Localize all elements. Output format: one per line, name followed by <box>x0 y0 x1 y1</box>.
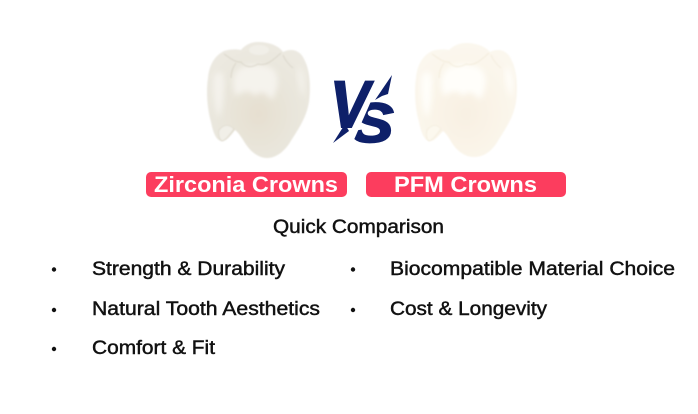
icon: VS emblem: S <box>351 92 394 154</box>
list item: Comfort & Fit <box>52 338 216 359</box>
icon: PFM crown tooth <box>415 43 517 157</box>
icon: zirconia crown tooth <box>207 42 310 158</box>
label: PFM Crowns <box>366 172 566 197</box>
list: right column <box>351 259 675 320</box>
label: Zirconia Crowns: Zirconia Crowns <box>154 172 338 197</box>
icon: VS emblem <box>330 69 394 154</box>
label: PFM Crowns: PFM Crowns <box>394 172 537 197</box>
heading: Quick Comparison: Quick Comparison <box>273 217 444 238</box>
list item: Cost & Longevity: Cost & Longevity <box>390 299 548 320</box>
icon: VS emblem: V <box>330 69 375 142</box>
list item: Natural Tooth Aesthetics: Natural Tooth Aesthetics <box>92 299 320 320</box>
list item: Strength & Durability: Strength & Durability <box>92 259 286 280</box>
list item: Comfort & Fit: Comfort & Fit <box>92 338 216 359</box>
list: left column <box>52 259 320 359</box>
list item: Biocompatible Material Choice: Biocompatible Material Choice <box>390 259 675 280</box>
